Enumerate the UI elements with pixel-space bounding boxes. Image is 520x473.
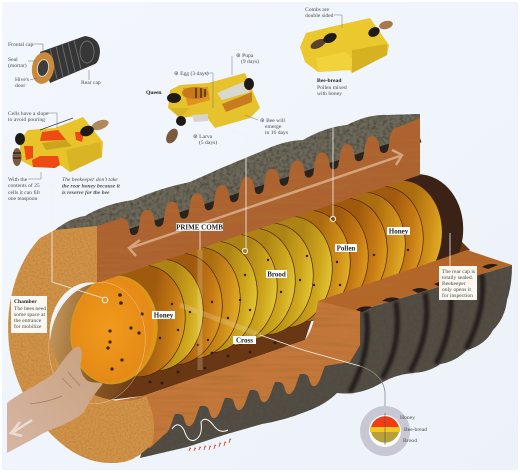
cylinder labels: (mortar) xyxy=(8,62,27,69)
icon: bee-bread comb xyxy=(300,18,394,73)
callout: rear cap: The rear cap is xyxy=(442,269,475,275)
red marks xyxy=(189,439,231,451)
label: brood: Brood xyxy=(267,270,286,278)
translucent guide ellipse xyxy=(41,276,153,410)
cylinder labels xyxy=(8,42,101,89)
cylinder labels: Frontal cap xyxy=(8,42,34,48)
pie labels: Honey xyxy=(400,415,415,421)
trough notches xyxy=(356,264,498,312)
comb notes: to avoid pouring xyxy=(8,117,45,123)
axis xyxy=(384,413,386,445)
front ellipse xyxy=(29,50,57,86)
brood labels: emerge xyxy=(265,124,282,130)
front honey disc xyxy=(64,271,164,389)
bee-bread labels: Bee-bread xyxy=(317,78,342,84)
double arrow on wall xyxy=(129,150,402,256)
brood labels: (9 days) xyxy=(241,58,259,65)
callout: rear cap: only opens it xyxy=(442,287,471,293)
brood labels: in 16 days xyxy=(265,130,288,136)
label: prime comb: PRIME COMB xyxy=(176,224,223,232)
callout: chamber: The bees need xyxy=(14,306,46,312)
bee left xyxy=(12,133,25,166)
callout: chamber: the entrance xyxy=(14,318,42,324)
arrow on comb xyxy=(40,118,73,130)
brood segment xyxy=(371,432,399,443)
callout: chamber: for mobilize xyxy=(14,323,42,330)
callout: rear cap xyxy=(439,266,477,300)
pie diagram xyxy=(360,406,427,456)
icon: honey cells comb xyxy=(12,117,110,172)
upper wood wall xyxy=(97,118,420,283)
bark shadow in valleys xyxy=(122,138,420,236)
label: cross: Cross xyxy=(236,336,253,344)
brood labels: Queen xyxy=(146,90,162,96)
icon: cylinder hive xyxy=(29,36,100,86)
brood labels: ⊛ Egg (3 days) xyxy=(174,70,209,77)
italic note: is reserve for the bee xyxy=(62,190,110,196)
door xyxy=(36,59,50,77)
label: cross xyxy=(233,336,256,344)
brood labels: ⊛ Pupa xyxy=(236,53,254,59)
callout: chamber: some space at xyxy=(14,312,46,318)
brood labels xyxy=(146,53,288,146)
callout: chamber: Chamber xyxy=(14,299,37,305)
comb notes: one teaspoon xyxy=(8,196,38,202)
interior floor with bees xyxy=(90,200,470,402)
bark: upper wall xyxy=(32,114,420,252)
stripes xyxy=(50,40,94,79)
brood cells xyxy=(183,87,210,106)
comb notes: With the xyxy=(8,177,28,183)
callout: rear cap: Beekeeper xyxy=(442,281,466,287)
cylinder labels: door xyxy=(15,83,25,89)
annotation labels xyxy=(8,7,347,202)
brood labels: (5 days) xyxy=(199,139,217,146)
italic note xyxy=(62,177,120,196)
translucent guide bands xyxy=(180,250,260,370)
label: pollen: Pollen xyxy=(337,244,355,252)
bee on side xyxy=(244,78,254,90)
callout: rear cap: for inspection xyxy=(442,292,473,299)
red honey cells xyxy=(24,130,84,168)
pie diagram: Brood xyxy=(403,438,417,444)
label: honey front: Honey xyxy=(154,312,174,320)
bee-bread labels: Pollen mixed xyxy=(317,85,347,91)
cylinder labels: Rear cap xyxy=(81,80,101,86)
queen bee xyxy=(167,87,208,103)
cylinder labels: Seal xyxy=(8,57,18,63)
comb notes: Cells have a slope xyxy=(8,111,49,117)
callout: chamber xyxy=(11,296,47,333)
lower wood trough xyxy=(96,301,360,448)
bee-bread labels: with honey xyxy=(317,91,342,97)
lower bark shell xyxy=(140,265,512,458)
bees xyxy=(309,19,394,51)
honey segment xyxy=(371,416,399,427)
cork end face xyxy=(8,226,154,463)
italic note: The beekeeper don't take xyxy=(62,177,118,183)
worker bee xyxy=(164,116,186,145)
bark folds xyxy=(350,274,483,392)
comb notes: contents of 25 xyxy=(8,182,40,189)
bee-bread labels: Combs are xyxy=(305,7,330,13)
trough top surface xyxy=(318,250,512,311)
hand xyxy=(7,347,102,453)
bee-bread labels: double sided xyxy=(305,13,334,19)
brood labels: ⊛ Bee will xyxy=(260,118,285,124)
comb notes: cells it can fill xyxy=(8,189,40,196)
bee-bread labels xyxy=(305,7,347,97)
comb notes xyxy=(8,111,57,202)
label: honey rear: Honey xyxy=(389,228,409,236)
comb shading xyxy=(42,140,72,150)
rear cap xyxy=(359,168,471,296)
bees on discs xyxy=(149,249,409,384)
brood labels: ⊛ Larva xyxy=(193,134,213,140)
callout: rear cap: totally sealed. xyxy=(442,275,474,281)
white wavy outline on lower tooth xyxy=(172,419,228,441)
hand arrow xyxy=(11,420,32,436)
italic note: the rear honey because it xyxy=(62,184,120,190)
log cross-section illustration xyxy=(7,114,512,463)
pie diagram: Bee-bread xyxy=(404,427,427,433)
comb discs xyxy=(90,174,449,383)
cylinder labels: Hive's xyxy=(15,77,29,83)
icon: brood comb xyxy=(164,73,260,145)
bee-bread segment xyxy=(370,427,400,432)
chamber inner wall xyxy=(42,277,152,409)
bee right xyxy=(79,118,110,138)
leader lines xyxy=(49,107,450,413)
